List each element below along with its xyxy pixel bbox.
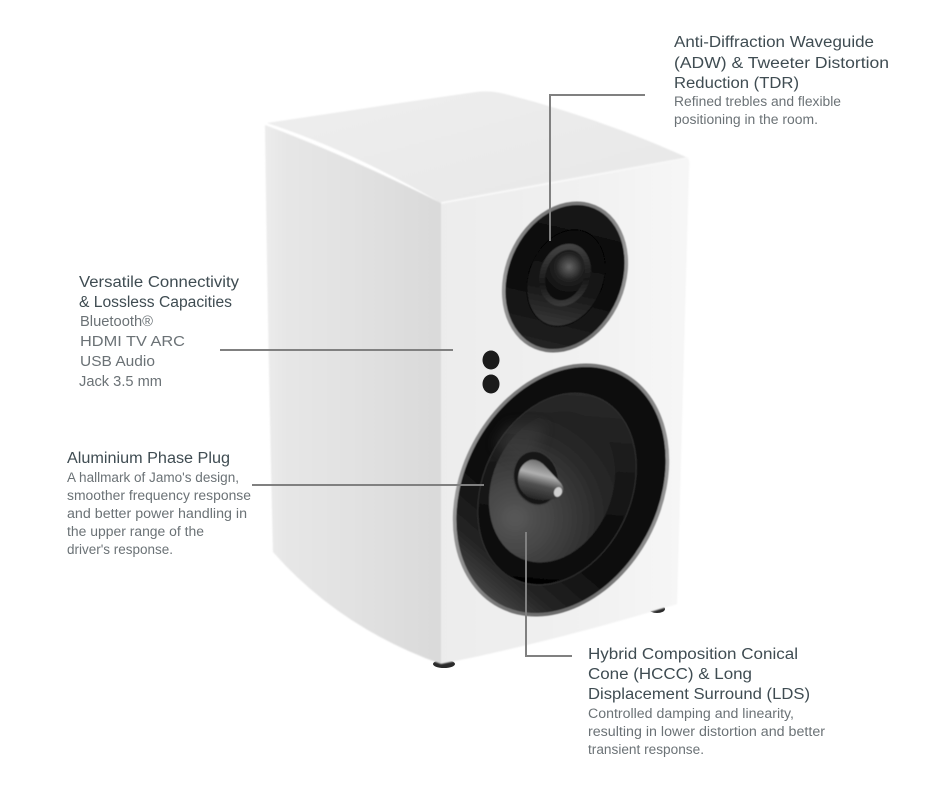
description: cone and surround: Controlled damping and linearity,	[588, 706, 794, 721]
cabinet top edge highlight	[441, 158, 688, 203]
text block: tweeter waveguide	[674, 34, 889, 127]
description: waveguide: positioning in the room.	[674, 112, 818, 127]
tweeter driver	[479, 182, 651, 372]
phase plug	[508, 446, 564, 510]
list: connection types: USB Audio	[80, 354, 155, 370]
description: phase plug: smoother frequency response	[67, 488, 251, 503]
callout line: phase plug	[252, 484, 484, 486]
heading: cone and surround: Cone (HCCC) & Long	[588, 666, 752, 683]
description: waveguide: Refined trebles and flexible	[674, 94, 841, 109]
text block: cone and surround	[588, 646, 826, 757]
heading: waveguide: Reduction (TDR)	[674, 75, 799, 92]
description: phase plug: the upper range of the	[67, 524, 204, 539]
callout line: tweeter	[550, 95, 645, 241]
cabinet left face	[265, 125, 441, 664]
list: connection types: Jack 3.5 mm	[79, 374, 162, 390]
heading: waveguide: Anti-Diffraction Waveguide	[674, 34, 874, 51]
heading: connectivity: & Lossless Capacities	[79, 294, 232, 311]
list: connection types: HDMI TV ARC	[80, 334, 185, 350]
cone light wedge	[495, 425, 545, 470]
heading: phase plug: Aluminium Phase Plug	[67, 450, 230, 467]
speaker feet	[433, 605, 665, 668]
speaker illustration	[265, 91, 712, 668]
control buttons	[482, 350, 500, 394]
woofer driver	[410, 326, 712, 654]
description: cone and surround: transient response.	[588, 742, 704, 757]
description: cone and surround: resulting in lower distortion and better	[588, 724, 826, 739]
description: phase plug: and better power handling in	[67, 506, 247, 521]
heading: connectivity: Versatile Connectivity	[79, 274, 239, 291]
cabinet front face	[441, 158, 689, 664]
text block: connectivity	[79, 274, 239, 390]
callout line: connectivity	[220, 349, 453, 351]
cabinet top face	[267, 91, 688, 203]
speaker cabinet	[265, 91, 689, 664]
text block: phase plug	[67, 450, 251, 557]
heading: cone and surround: Displacement Surround (LDS)	[588, 686, 810, 703]
description: phase plug: A hallmark of Jamo's design,	[67, 470, 239, 485]
list: connection types: Bluetooth®	[80, 314, 153, 330]
callout line: cone and surround	[526, 532, 572, 656]
heading: waveguide: (ADW) & Tweeter Distortion	[674, 55, 889, 72]
description: phase plug: driver's response.	[67, 542, 173, 557]
heading: cone and surround: Hybrid Composition Conical	[588, 646, 798, 663]
